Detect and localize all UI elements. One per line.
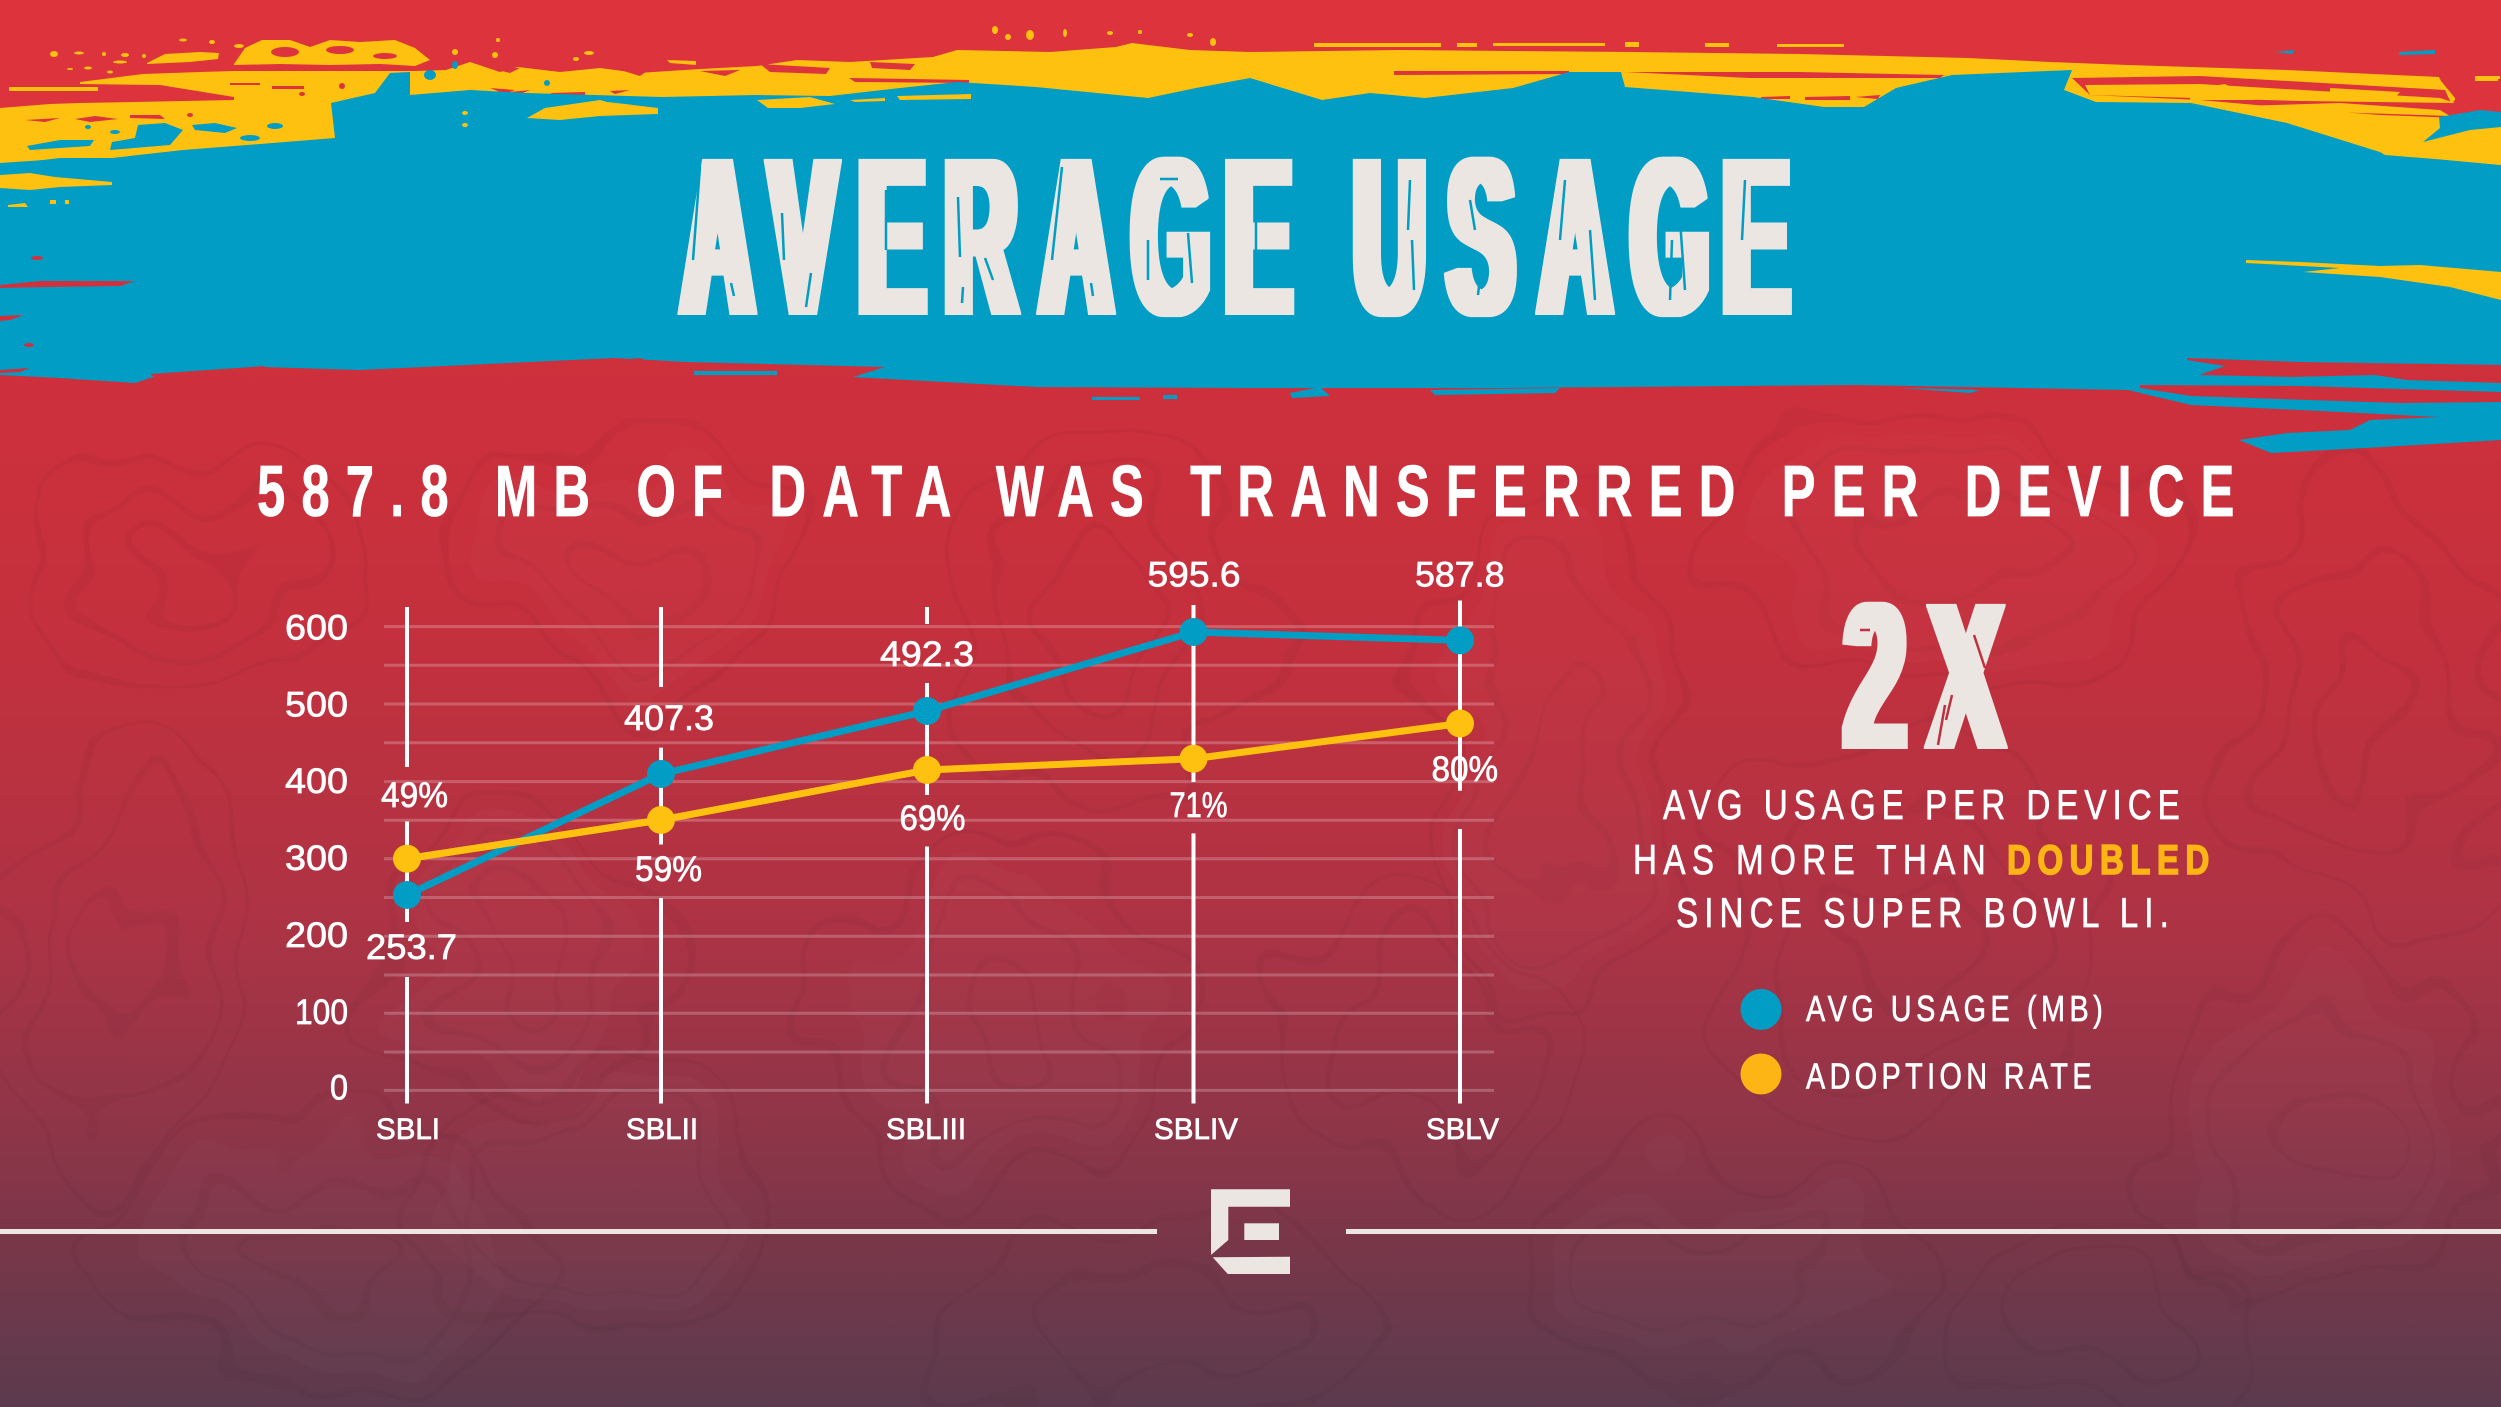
legend: AVG USAGE (MB) [1806,988,2103,1029]
vertical event lines [407,600,1460,1104]
gridlines [384,627,1494,1090]
x axis labels: SBLIII [886,1113,966,1146]
icon: E logo [1211,1189,1290,1274]
data value labels: 587.8 [1415,556,1504,595]
redraw yellow over blue at crossing [421,822,647,856]
data value labels: 595.6 [1148,556,1240,595]
y axis labels: 300 [285,839,348,878]
data value labels: 59% [635,850,702,889]
x axis labels: SBLIV [1154,1113,1238,1146]
red streaks over yellow [25,60,2501,128]
subheading: 587.8 MB OF DATA WAS TRANSFERRED PER DEVICE [257,451,2234,532]
description text: AVG USAGE PER DEVICE [1663,781,2180,828]
data value labels: 407.3 [624,699,714,738]
x axis labels: SBLV [1426,1113,1499,1146]
x axis labels: SBLII [626,1113,698,1146]
description text: SINCE SUPER BOWL LI. [1676,889,2169,936]
data value labels: 69% [900,799,966,838]
red streaks over blue [0,256,2501,403]
data value labels: 80% [1432,750,1498,789]
footer divider lines and logo [0,1189,2501,1274]
data value labels: 492.3 [880,635,974,674]
y axis labels: 0 [330,1068,348,1108]
description text [1633,781,2209,936]
data value labels: 71% [1170,786,1228,825]
red holes in top spatter [271,46,397,59]
big stat: 2X: 2X [1845,561,2002,793]
title: AVERAGE USAGE [682,111,1789,362]
data value labels: 49% [381,776,448,815]
legend [1740,988,2103,1096]
x axis labels [376,1113,1499,1146]
data value labels [366,556,1504,967]
yellow paint stroke [0,43,2501,200]
highlighted line: DOUBLED [2007,836,2209,883]
y axis labels: 600 [285,609,348,648]
blue paint stroke [0,70,2501,453]
yellow strips inside the red streaks [9,78,2498,116]
average usage line [393,618,1474,909]
highlighted line [1633,836,2209,883]
y axis labels: 400 [285,762,348,801]
yellow paint spatter above the stroke [50,26,2500,79]
yellow paint remnants over blue [0,94,2501,300]
y axis labels: 200 [285,916,348,955]
blue blotches in yellow [0,50,2501,172]
blue flecks below the stroke [694,371,1980,400]
stat distress marks [1860,630,1985,745]
title distress marks [693,167,1745,307]
highlighted line: HAS MORE THAN [1633,836,1986,883]
line chart: average usage and adoption rate [285,556,1504,1146]
adoption rate line [393,710,1474,873]
x axis labels: SBLI [376,1113,440,1146]
y axis labels: 500 [285,686,348,725]
y axis labels: 100 [295,993,348,1032]
data value labels: 253.7 [366,928,457,967]
legend: ADOPTION RATE [1806,1055,2092,1096]
banner: paint brush strokes [0,26,2501,453]
y axis labels [285,609,348,1108]
